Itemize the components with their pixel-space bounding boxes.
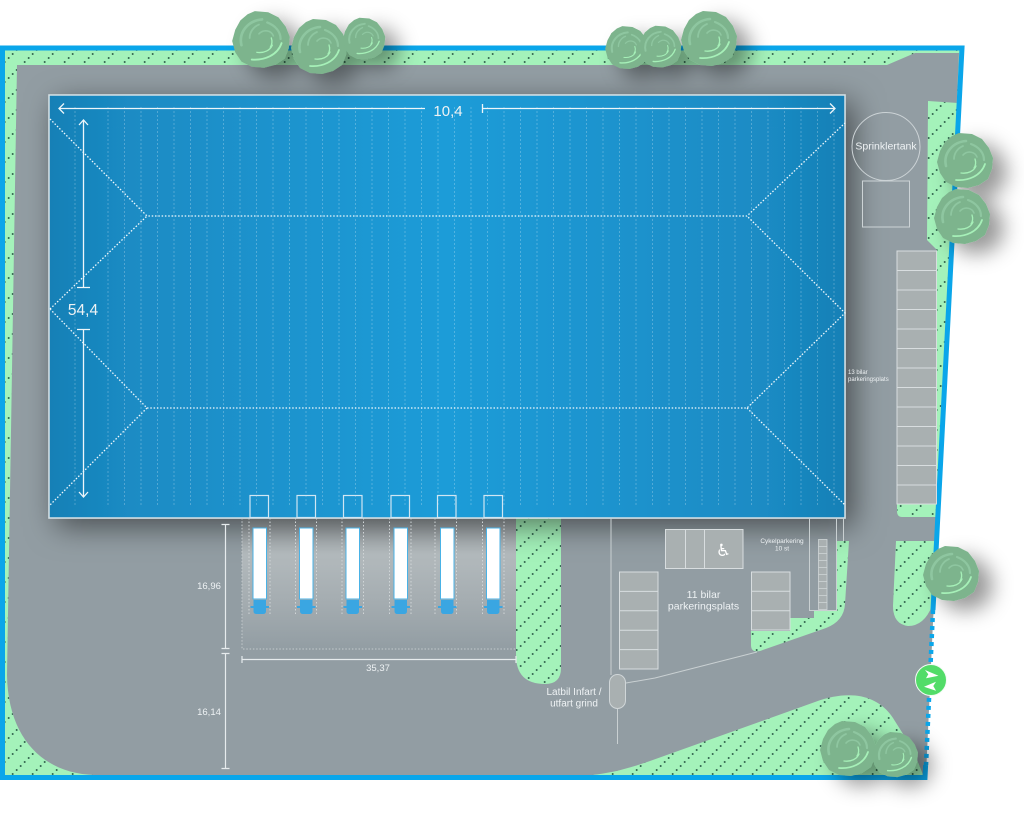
truck 2: [296, 518, 316, 615]
label: gate: utfart grind: [550, 698, 598, 710]
trees: north group east: [605, 11, 737, 69]
truck 5: [435, 518, 456, 615]
dimension: 16,14: 16,14: [197, 707, 221, 718]
panel: west parking row: [620, 572, 658, 669]
panel: 13-space car park: [897, 251, 936, 504]
label: 11 bilar: parkeringsplats: [668, 600, 739, 612]
trucks: [249, 518, 504, 615]
trees: north group west: [232, 11, 385, 74]
panel: warehouse building: [49, 95, 845, 518]
loading yard outline: [242, 518, 516, 649]
label: 13 bilar: 13 bilar: [848, 370, 868, 376]
label: 13 bilar: [848, 370, 889, 383]
dock doors: [250, 496, 502, 518]
truck 6: [482, 518, 504, 615]
label: 11 bilar: [668, 589, 739, 612]
gate and access lines: [610, 518, 757, 744]
label: 11 bilar: 11 bilar: [687, 589, 721, 601]
dimension: 35,37: [242, 656, 516, 674]
panel: east parking row: [752, 572, 790, 630]
green island: beside car park: [751, 541, 849, 651]
dimension: building length: [59, 103, 835, 120]
roof ridge lines: [50, 119, 845, 505]
truck 4: [390, 518, 411, 615]
trees: south group: [820, 721, 918, 777]
label: cykelparkering: 10 st: [775, 546, 789, 552]
green island: lower right: [592, 695, 923, 775]
label: cykelparkering: [760, 538, 804, 552]
icon: north arrow: [916, 664, 946, 696]
icon: wheelchair: ♿: [716, 541, 731, 561]
panel: bicycle parking: [810, 518, 844, 610]
panel: accessible parking: [666, 530, 743, 568]
green island: beside entrance: [893, 541, 935, 626]
truck 1: [249, 518, 270, 615]
label: cykelparkering: Cykelparkering: [760, 538, 804, 545]
dimension: 16,14: [197, 654, 230, 768]
panel: sprinkler tank: [852, 112, 920, 227]
label: gate: Latbil Infart /: [546, 687, 602, 698]
dimension: 16,96: 16,96: [197, 581, 221, 592]
truck 3: [342, 518, 364, 615]
dimension: building width: [68, 120, 98, 497]
roof ribs: [73, 107, 838, 505]
label: gate: [546, 687, 602, 710]
panel: sprinkler tank: Sprinklertank: [855, 140, 917, 152]
dimension: 35,37: 35,37: [366, 663, 390, 674]
trees: east group: [934, 133, 993, 244]
dimension: building width: 54,4: [68, 302, 98, 319]
label: 13 bilar: parkeringsplats: [848, 377, 889, 383]
truck yard surface: [242, 518, 516, 650]
green island: beside loading yard: [516, 518, 561, 684]
tree: entrance: [923, 546, 979, 601]
dimension: building length: 10,4: [433, 103, 463, 120]
green island: east strip: [927, 101, 958, 505]
green island: patch below car park: [897, 503, 937, 517]
dimension: 16,96: [197, 524, 230, 648]
